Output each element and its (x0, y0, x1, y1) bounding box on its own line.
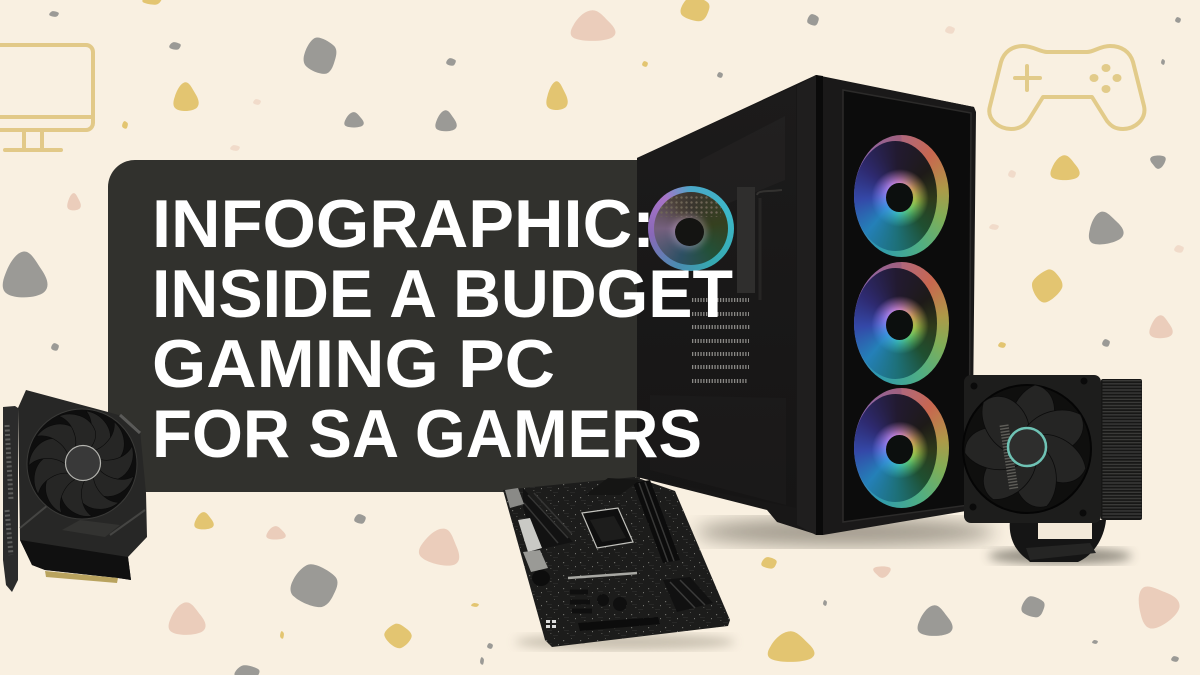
title: INFOGRAPHIC: (152, 186, 655, 262)
icon: front RGB fan bottom (854, 388, 949, 508)
icon: front RGB fan middle (854, 262, 949, 385)
title: INSIDE A BUDGET (152, 256, 733, 332)
title: GAMING PC (152, 326, 555, 402)
icon: side panel RGB fan (648, 186, 734, 271)
icon: game controller outline (989, 46, 1144, 129)
motherboard (503, 477, 735, 650)
icon: monitor outline (0, 45, 93, 150)
graphics card (3, 390, 147, 592)
icon: front RGB fan top (854, 135, 949, 257)
CPU cooler (960, 375, 1142, 564)
panel: dark title background (108, 160, 640, 492)
title: FOR SA GAMERS (152, 396, 702, 472)
